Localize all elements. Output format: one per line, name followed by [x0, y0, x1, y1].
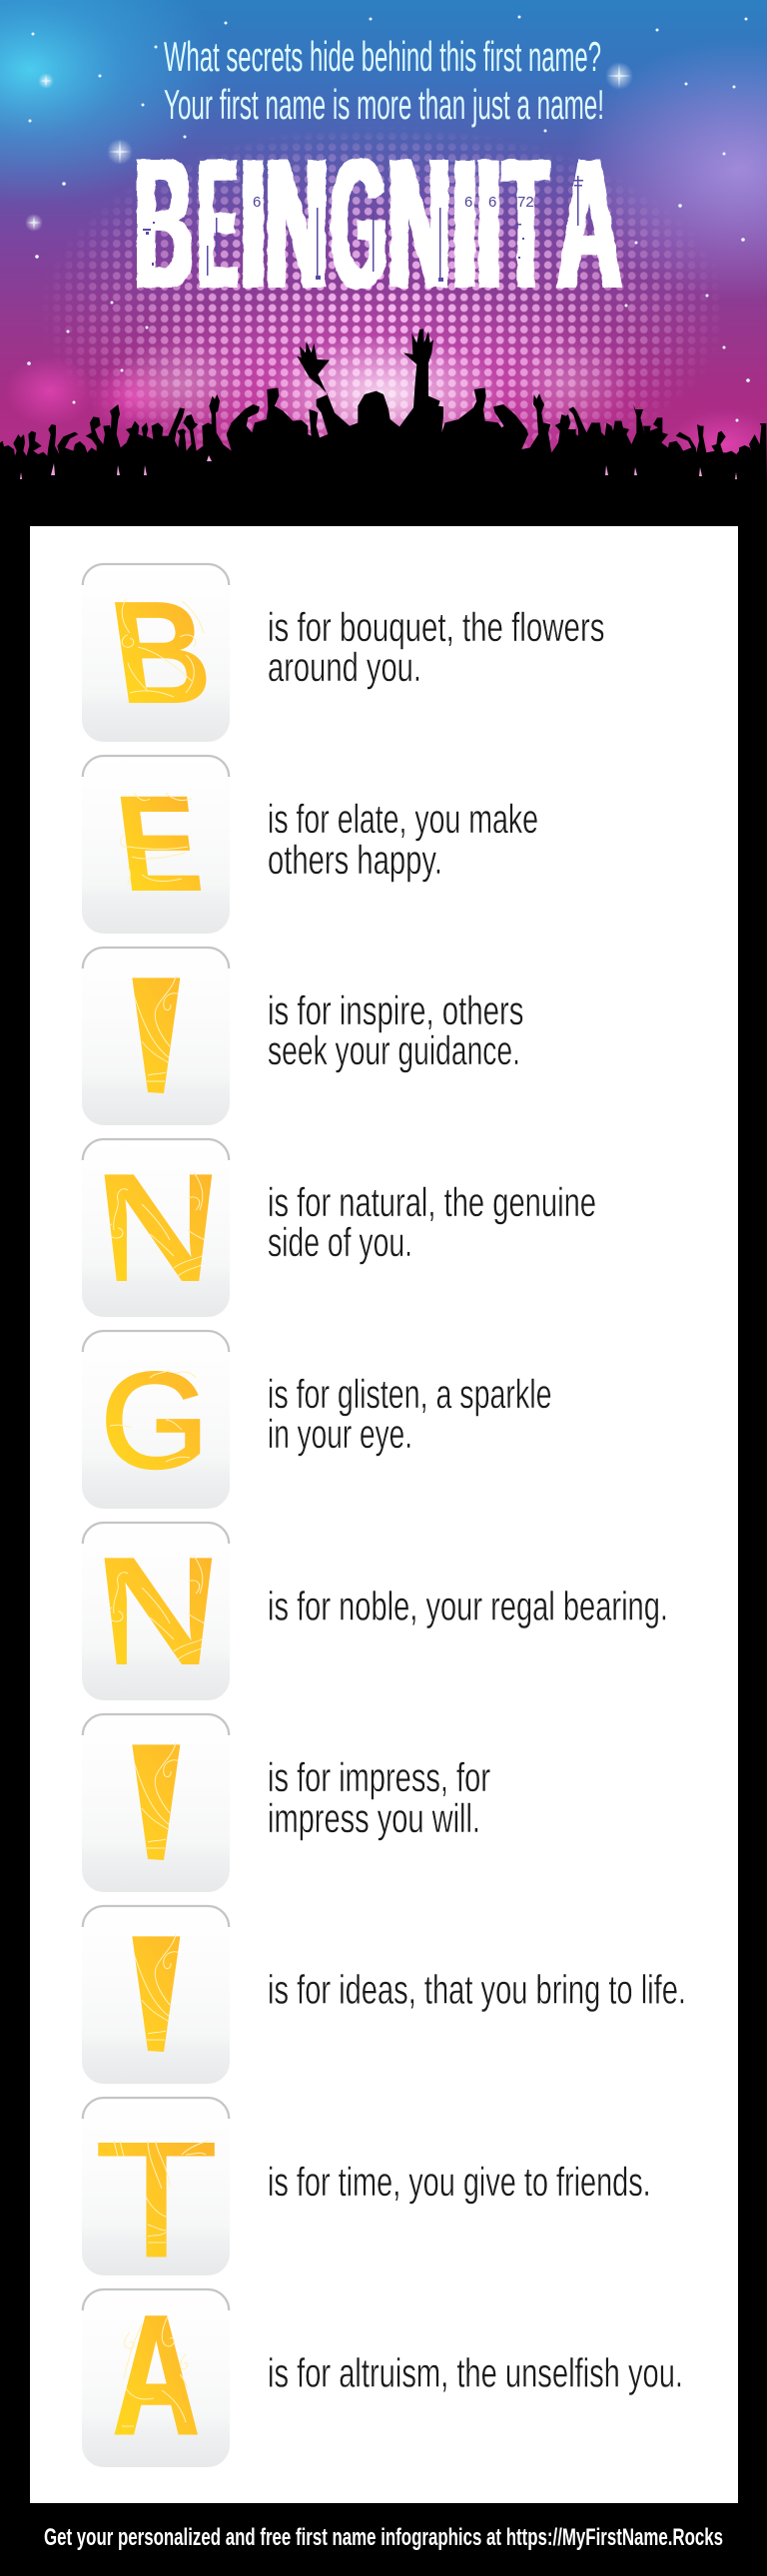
row: T is for time: [82, 2097, 651, 2292]
text: G line: in your eye.: [268, 1411, 412, 1457]
letter tile: A: A: [113, 2281, 200, 2470]
title: first name: A: [557, 119, 621, 327]
title: first name: I: [475, 121, 502, 327]
letter tile: I: [132, 1933, 180, 2052]
letter tile: E: E: [109, 767, 210, 920]
text: I line: seek your guidance.: [268, 1027, 520, 1073]
text: E line: [268, 796, 538, 883]
title: first name: N: [266, 120, 328, 327]
row: I is for impress: [82, 1708, 490, 1896]
text: G line: [268, 1371, 551, 1457]
row: N is for noble: [82, 1522, 668, 1700]
text: B line: [268, 604, 605, 690]
title: first name: E: [199, 120, 237, 328]
title: first name: 6: [464, 194, 472, 211]
letter tile: I: I: [96, 1708, 217, 1896]
LED dot wall: [54, 132, 713, 450]
text: I line: impress you will.: [268, 1795, 480, 1841]
letter tile: B: B: [102, 571, 220, 734]
row: A is for altruism: [82, 2281, 683, 2470]
text: B line: around you.: [268, 644, 421, 690]
title: first name: T: [503, 119, 548, 327]
text: N line: [268, 1179, 596, 1265]
row: B is for bouquet: [82, 563, 605, 742]
row: I is for inspire: [82, 942, 523, 1129]
title: first name: N: [388, 120, 450, 327]
row: E is for elate: [82, 755, 538, 934]
letter tile: G: G: [101, 1345, 209, 1497]
header banner background: [0, 0, 767, 499]
letter tile: I: [132, 1741, 180, 1860]
letter tile: N: N: [90, 1140, 227, 1314]
text: N line: is for natural, the genuine: [268, 1179, 596, 1225]
text: E line: others happy.: [268, 837, 442, 883]
text: G line: is for glisten, a sparkle: [268, 1371, 551, 1417]
letter tile: T: T: [94, 2108, 219, 2292]
row: N is for natural: [82, 1138, 596, 1317]
sparkles: [25, 16, 750, 421]
title: first name: I: [240, 121, 267, 327]
text: N line: side of you.: [268, 1219, 412, 1265]
text: I line: [268, 1754, 490, 1841]
title: first name: 72: [517, 194, 534, 211]
row: I is for ideas: [82, 1900, 686, 2088]
letter tile: I: [132, 974, 180, 1093]
title: first name: B: [135, 120, 193, 327]
title: first name: G: [332, 120, 386, 327]
letter tile: N: [104, 1172, 212, 1281]
text: E line: is for elate, you make: [268, 796, 538, 842]
crowd silhouette: [0, 328, 767, 526]
letter tile: I: I: [96, 942, 217, 1129]
row: G is for glisten: [82, 1330, 551, 1509]
title: first name: 6: [253, 194, 261, 211]
text: I line: is for inspire, others: [268, 987, 523, 1033]
letter tile: N: N: [90, 1524, 227, 1697]
text: B line: is for bouquet, the flowers: [268, 604, 605, 650]
title: first name: I: [451, 121, 478, 327]
panel: white content: [30, 526, 738, 2503]
text: I line: [268, 987, 523, 1073]
letter tile: N: [104, 1556, 212, 1664]
heading: tagline: [164, 33, 604, 128]
title: first name: [135, 119, 621, 328]
text: I line: is for impress, for: [268, 1754, 490, 1800]
letter tile: I: I: [96, 1900, 217, 2088]
title: first name: 6: [488, 194, 496, 211]
